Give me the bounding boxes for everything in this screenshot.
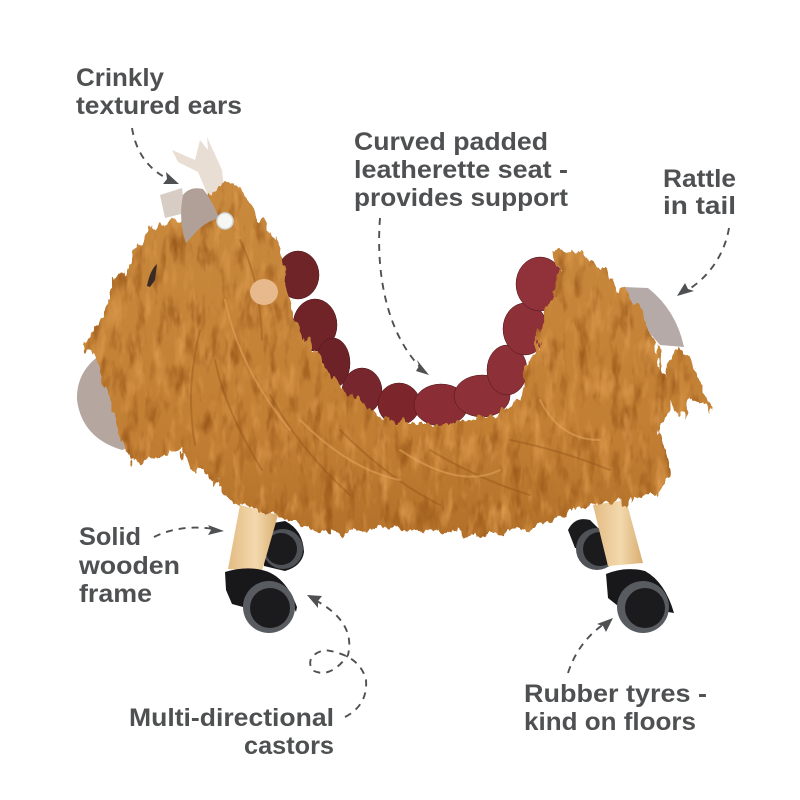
- label: castors: castors: [244, 732, 334, 760]
- arrow: to tyres: [568, 618, 613, 673]
- label: tail: [663, 165, 736, 220]
- eye: [147, 264, 157, 287]
- arrow: to seat: [379, 218, 429, 375]
- label: wooden frame: frame: [79, 580, 152, 608]
- label: crinkly ears: Crinkly: [76, 64, 164, 92]
- label: castors: [129, 704, 334, 760]
- rear castor: [606, 569, 674, 633]
- label: crinkly ears: textured ears: [76, 92, 242, 120]
- label: castors: Multi-directional: [129, 704, 334, 732]
- arrow: looping to castor: [307, 595, 366, 717]
- wooden handle: [250, 279, 278, 305]
- label: tail: in tail: [663, 192, 736, 220]
- fur texture strands: [191, 240, 610, 505]
- back wheel, front side: [262, 521, 304, 571]
- tail grey tuft: [622, 287, 684, 347]
- back wheel, rear side: [568, 519, 618, 570]
- ear: [181, 188, 219, 243]
- label: seat: Curved padded: [354, 128, 548, 156]
- label: crinkly ears: [76, 64, 242, 120]
- label: seat: [354, 128, 569, 212]
- front castor: [225, 568, 297, 633]
- label: tyres: [524, 680, 707, 736]
- wooden leg, front: [228, 505, 278, 571]
- shaggy fur body: [84, 180, 712, 537]
- leatherette seat: [277, 251, 564, 426]
- label: tail: Rattle: [663, 165, 736, 193]
- label: tyres: kind on floors: [524, 708, 696, 736]
- arrow: to tail: [677, 228, 729, 296]
- wooden leg, back: [593, 500, 643, 566]
- ear tufts: [160, 137, 226, 218]
- muzzle: [77, 355, 150, 450]
- label: wooden frame: Solid: [79, 523, 141, 551]
- label: seat: provides support: [354, 184, 569, 212]
- label: tyres: Rubber tyres -: [524, 680, 707, 708]
- label: seat: leatherette seat -: [354, 156, 568, 184]
- label: wooden frame: wooden: [78, 552, 180, 580]
- ear tag ring: [217, 213, 233, 229]
- arrow: to ears: [132, 128, 179, 184]
- arrow: to frame: [154, 525, 224, 537]
- label: wooden frame: [78, 523, 180, 608]
